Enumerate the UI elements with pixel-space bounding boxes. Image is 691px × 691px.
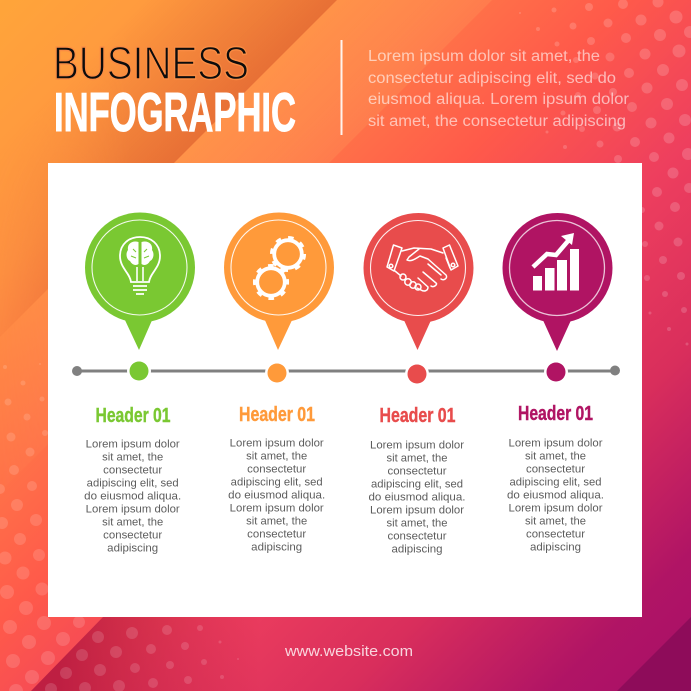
body 4: Lorem ipsum dolor <box>508 438 603 450</box>
intro paragraph: eiusmod aliqua. Lorem ipsum dolor <box>368 91 629 108</box>
body 1: adipiscing <box>107 543 158 555</box>
footer website: www.website.com <box>284 643 413 660</box>
body 4: sit amet, the <box>525 450 586 462</box>
body 3 <box>368 440 466 556</box>
header 4: Header 01 <box>518 403 593 425</box>
body 3: consectetur <box>388 530 447 542</box>
icon: bars and rising arrow <box>533 233 579 290</box>
intro paragraph: sit amet, the consectetur adipiscing <box>368 113 626 130</box>
pin 2: gears <box>224 212 334 350</box>
body 2: consectetur <box>247 529 307 541</box>
body 1: sit amet, the <box>102 452 163 464</box>
body 3: sit amet, the <box>386 518 448 530</box>
column 3 text <box>368 405 466 556</box>
column 1 text <box>84 405 181 555</box>
body 3: adipiscing elit, sed <box>371 478 463 490</box>
header divider <box>340 40 342 135</box>
intro paragraph: consectetur adipiscing elit, sed do <box>368 70 616 87</box>
body 1: consectetur <box>103 530 163 542</box>
body 1: sit amet, the <box>102 517 163 529</box>
body 1: consectetur <box>103 465 163 477</box>
body 3: do eiusmod aliqua. <box>368 492 466 504</box>
white panel <box>48 163 642 617</box>
intro paragraph: Lorem ipsum dolor sit amet, the <box>368 48 600 65</box>
body 2: Lorem ipsum dolor <box>230 503 324 515</box>
header 3: Header 01 <box>380 405 456 427</box>
icon: gears <box>255 238 304 298</box>
pin 3: handshake <box>364 213 474 350</box>
header 2: Header 01 <box>239 404 315 426</box>
body 3: consectetur <box>388 466 447 478</box>
title: INFOGRAPHIC <box>54 81 296 143</box>
body 4: consectetur <box>526 528 585 540</box>
timeline <box>72 359 620 386</box>
body 2: do eiusmod aliqua. <box>228 490 325 502</box>
body 1: Lorem ipsum dolor <box>86 439 180 451</box>
body 4: Lorem ipsum dolor <box>508 502 603 514</box>
column 4 text <box>507 403 604 554</box>
body 3: Lorem ipsum dolor <box>370 504 464 516</box>
column 2 text <box>228 404 325 554</box>
title <box>53 37 296 143</box>
body 2: sit amet, the <box>246 451 307 463</box>
body 2: adipiscing elit, sed <box>231 477 323 489</box>
pin 4: growth chart <box>502 213 612 351</box>
body 2: sit amet, the <box>246 516 307 528</box>
body 4 <box>507 438 604 554</box>
title: BUSINESS <box>53 37 249 89</box>
body 4: do eiusmod aliqua. <box>507 490 604 502</box>
body 1: adipiscing elit, sed <box>87 478 179 490</box>
body 3: sit amet, the <box>386 452 448 464</box>
header 1: Header 01 <box>96 405 170 427</box>
body 1 <box>84 439 181 555</box>
body 1: do eiusmod aliqua. <box>84 491 181 503</box>
body 4: adipiscing <box>530 542 581 554</box>
intro paragraph <box>368 48 629 130</box>
pin 1: idea <box>85 212 195 350</box>
body 3: adipiscing <box>392 544 442 556</box>
body 2: Lorem ipsum dolor <box>230 438 324 450</box>
icon: light bulb with brain <box>120 237 160 294</box>
body 2: consectetur <box>247 464 307 476</box>
body 4: consectetur <box>526 464 585 476</box>
body 3: Lorem ipsum dolor <box>370 440 464 452</box>
body 1: Lorem ipsum dolor <box>86 504 180 516</box>
body 2 <box>228 438 325 554</box>
background dots: top right <box>519 0 691 346</box>
body 4: sit amet, the <box>525 516 586 528</box>
body 4: adipiscing elit, sed <box>510 476 602 488</box>
background dots: bottom left <box>0 363 239 691</box>
body 2: adipiscing <box>251 542 302 554</box>
icon: handshake <box>387 245 458 291</box>
